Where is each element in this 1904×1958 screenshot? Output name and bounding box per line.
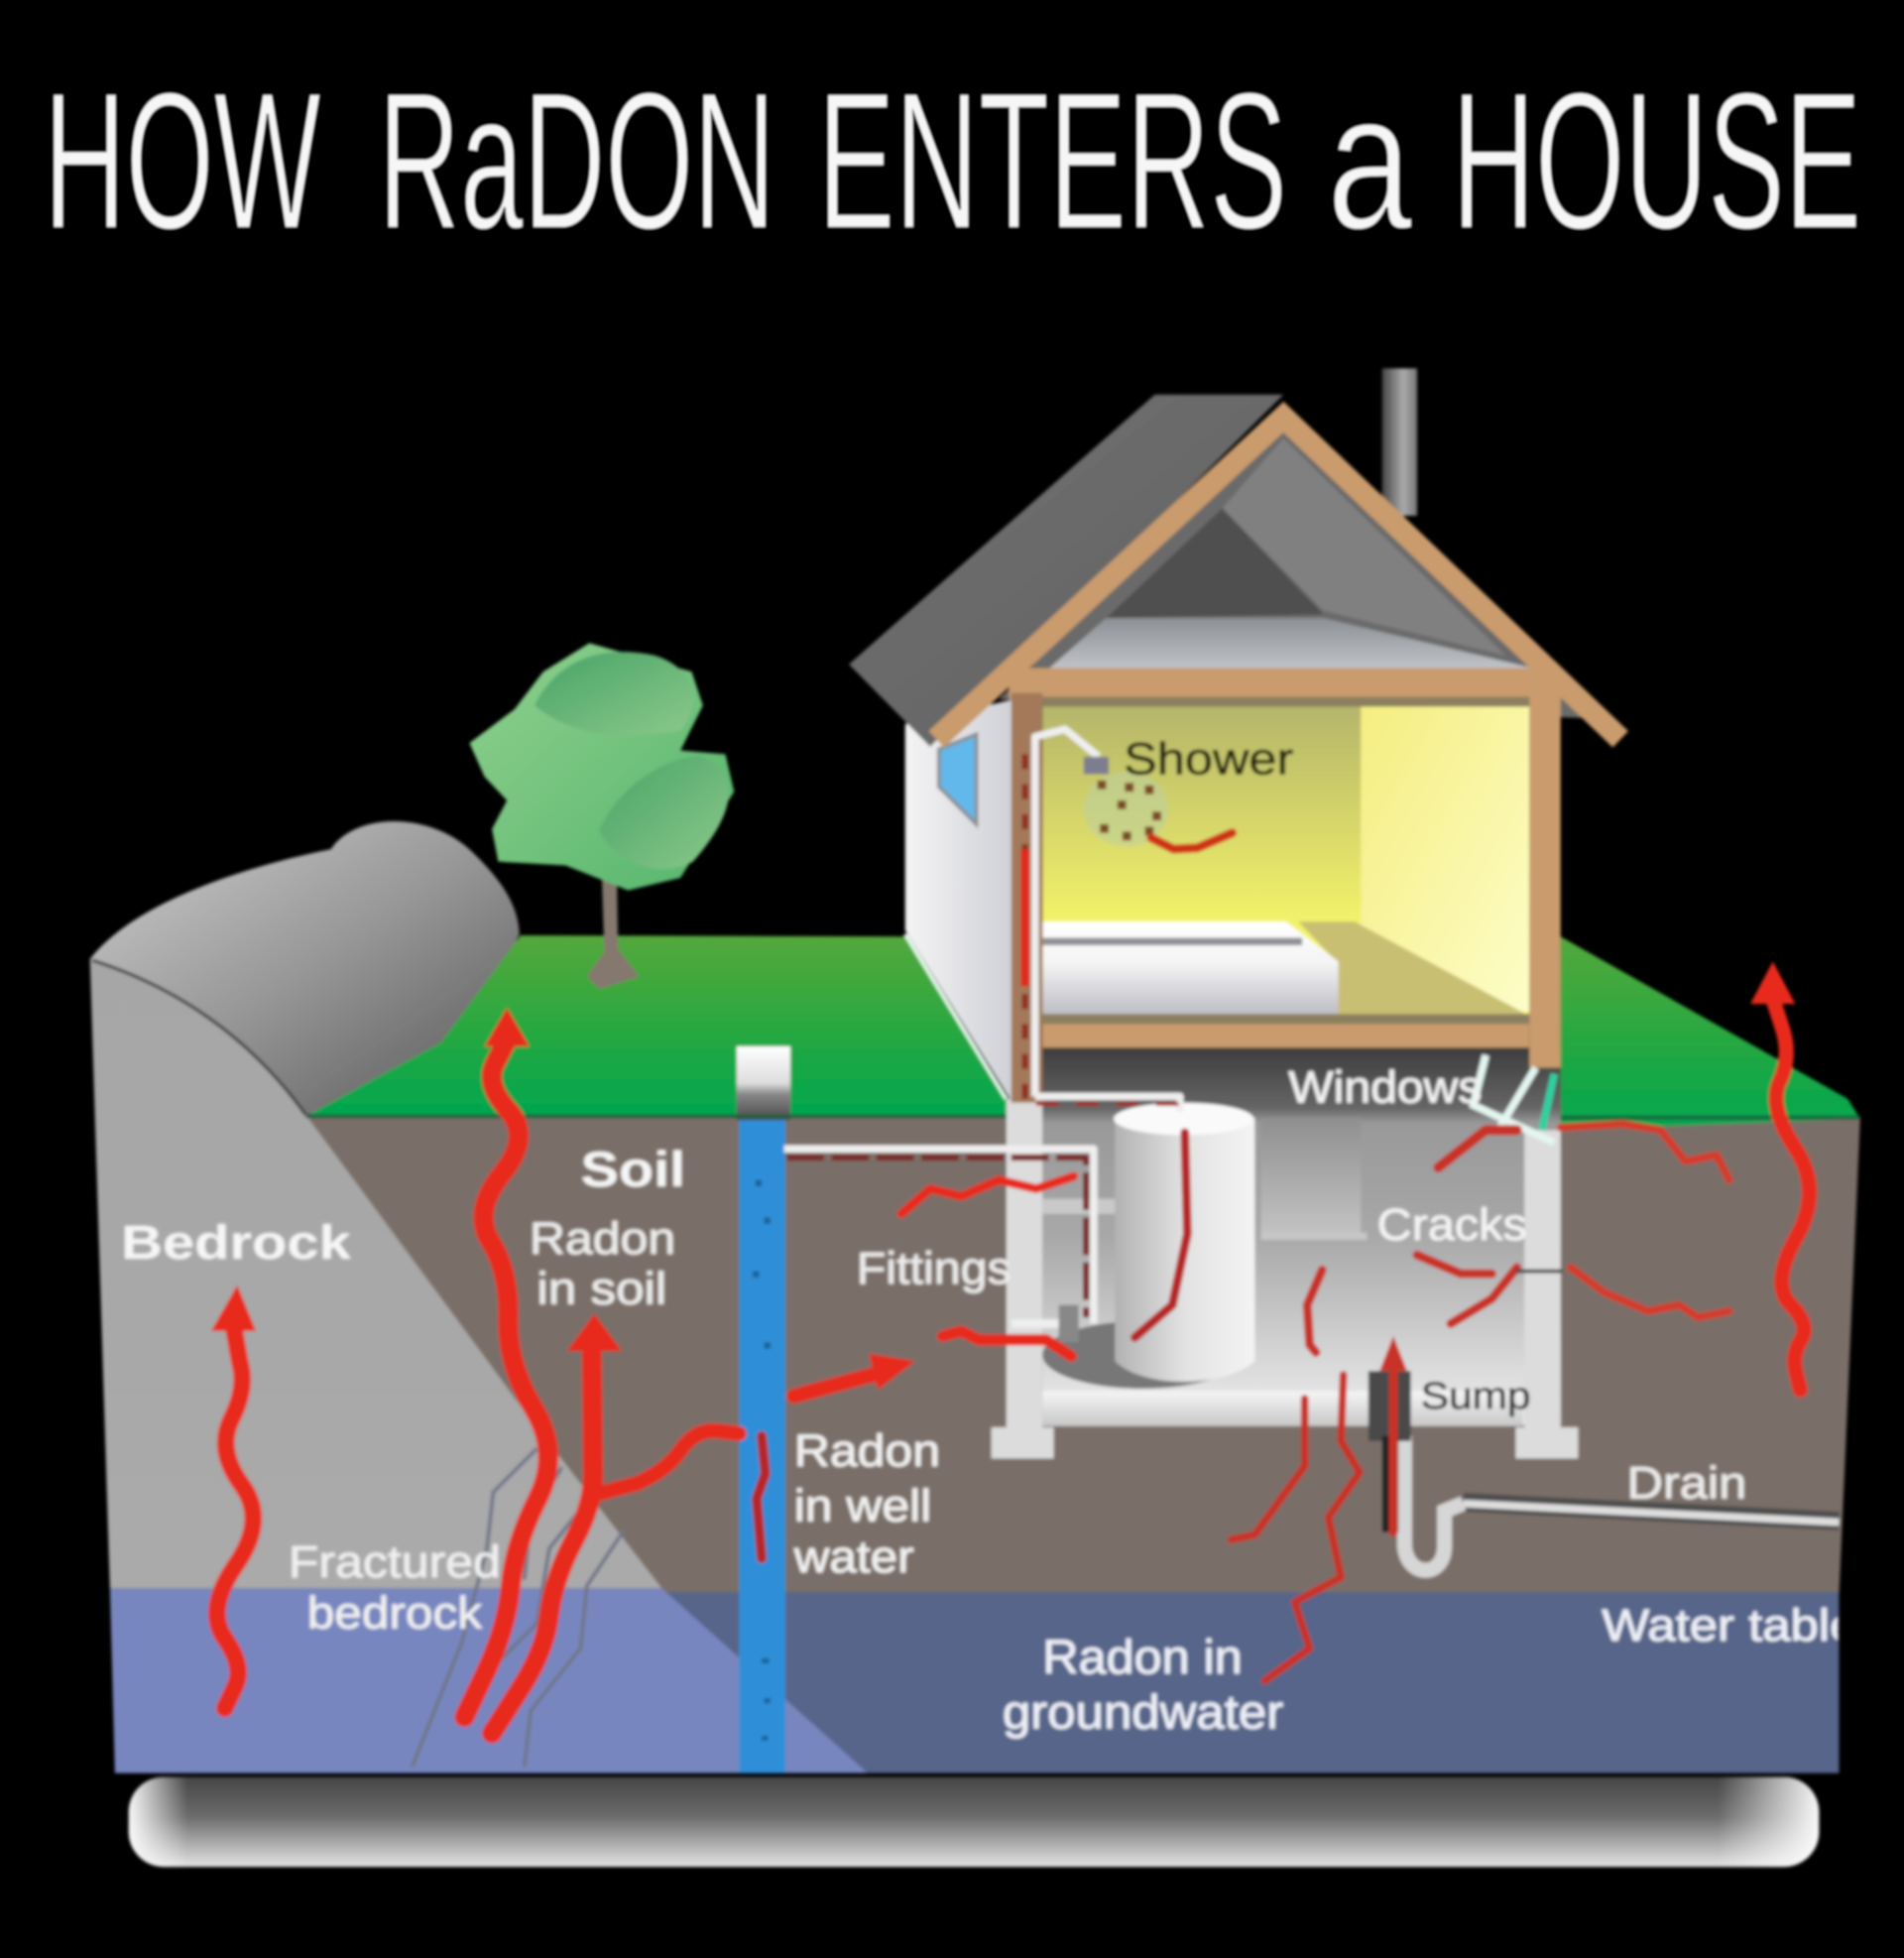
arrow: radon at window xyxy=(1438,1130,1517,1167)
hill xyxy=(90,821,520,1115)
arrow: radon in heater xyxy=(1134,1133,1187,1337)
arrow: radon rising through soil to the lawn xyxy=(464,1008,548,1717)
label: radon in well water: Radon xyxy=(794,1425,940,1476)
title xyxy=(44,51,1861,270)
label: radon in groundwater xyxy=(1003,1632,1283,1739)
shower head and droplets xyxy=(1084,757,1168,847)
plumbing pipes xyxy=(784,729,1180,1342)
house: timber frame xyxy=(936,417,1620,1103)
label: radon in well water: in well xyxy=(794,1480,931,1530)
label: radon in soil xyxy=(530,1213,675,1313)
tree xyxy=(469,643,734,989)
arrow: radon through slab xyxy=(1307,1270,1322,1352)
arrow: radon toward cracks xyxy=(1571,1268,1729,1317)
label: radon in groundwater: Radon in xyxy=(1042,1632,1243,1684)
arrow: radon right of house xyxy=(1750,961,1810,1390)
grass: right lawn xyxy=(1561,936,1860,1130)
house: window xyxy=(939,734,977,824)
label: windows: Windows xyxy=(1288,1062,1482,1113)
basement window xyxy=(1474,1055,1554,1143)
bathtub xyxy=(1042,921,1339,1014)
arrow: radon through sump xyxy=(1379,1336,1407,1532)
grass: left lawn xyxy=(303,935,1009,1118)
base shadow xyxy=(129,1776,1819,1867)
label: drain: Drain xyxy=(1626,1458,1746,1509)
arrow: radon from soil to slab xyxy=(1231,1399,1305,1539)
label: water table: Water table xyxy=(1602,1600,1857,1651)
label: cracks: Cracks xyxy=(1377,1199,1527,1250)
illustration: cross-section of ground and house xyxy=(90,368,1860,1867)
arrow: radon through fittings lower xyxy=(943,1331,1071,1356)
arrow: radon through fittings upper xyxy=(901,1176,1074,1214)
basement xyxy=(1042,1047,1561,1426)
arrow: radon at shower xyxy=(1151,833,1233,849)
label: shower: Shower xyxy=(1124,734,1293,785)
groundwater band xyxy=(661,1592,1839,1774)
arrow: radon branch to the well xyxy=(594,1430,739,1495)
house: room xyxy=(1042,699,1529,1024)
foundation walls and footings xyxy=(992,1099,1578,1458)
label: bedrock: Bedrock xyxy=(121,1217,351,1270)
label: fractured bedrock: Fractured xyxy=(289,1536,501,1587)
title: RaDON xyxy=(379,51,775,270)
label: sump: Sump xyxy=(1421,1376,1531,1417)
label: soil: Soil xyxy=(580,1141,685,1197)
label: radon in groundwater: groundwater xyxy=(1003,1686,1283,1739)
label: radon in soil: in soil xyxy=(536,1263,666,1313)
radon arrows xyxy=(211,833,1810,1733)
house: left wall xyxy=(905,699,1013,1105)
bedrock fractures xyxy=(413,1448,625,1767)
bedrock xyxy=(90,959,661,1588)
arrow: radon toward window xyxy=(1561,1124,1729,1180)
arrow: radon from groundwater xyxy=(1264,1375,1360,1681)
arrow: radon through bedrock xyxy=(211,1285,256,1708)
hill ridge line xyxy=(92,960,306,1115)
house: left roof slope xyxy=(849,395,1283,747)
label: radon in well water: water xyxy=(793,1531,914,1582)
water heater xyxy=(1042,1103,1254,1389)
house: attic xyxy=(999,430,1586,718)
chimney xyxy=(1382,368,1417,516)
well shaft xyxy=(737,1046,790,1774)
lawn edge line xyxy=(306,1116,1860,1118)
title: ENTERS xyxy=(818,51,1287,270)
label: fractured bedrock: bedrock xyxy=(307,1588,482,1639)
arrow: radon in well water xyxy=(757,1436,766,1558)
lawn highlight along wall xyxy=(905,934,1007,1099)
label: fractured bedrock xyxy=(289,1536,501,1639)
arrow: radon from well into soil xyxy=(794,1354,915,1396)
crack line to soil xyxy=(1517,1270,1561,1273)
label: radon in soil: Radon xyxy=(530,1213,675,1264)
label: fittings: Fittings xyxy=(857,1243,1012,1293)
title: HOW xyxy=(44,51,321,270)
arrow: radon crack upper xyxy=(1417,1255,1491,1274)
title: a xyxy=(1327,51,1412,270)
arrow: radon in soil xyxy=(492,1313,622,1733)
label: radon in well water xyxy=(793,1425,940,1582)
arrow: radon crack lower xyxy=(1451,1268,1517,1323)
drain pipe and trap xyxy=(1368,1371,1839,1570)
soil layer xyxy=(306,1118,1860,1596)
bedrock below the water table xyxy=(110,1588,868,1774)
